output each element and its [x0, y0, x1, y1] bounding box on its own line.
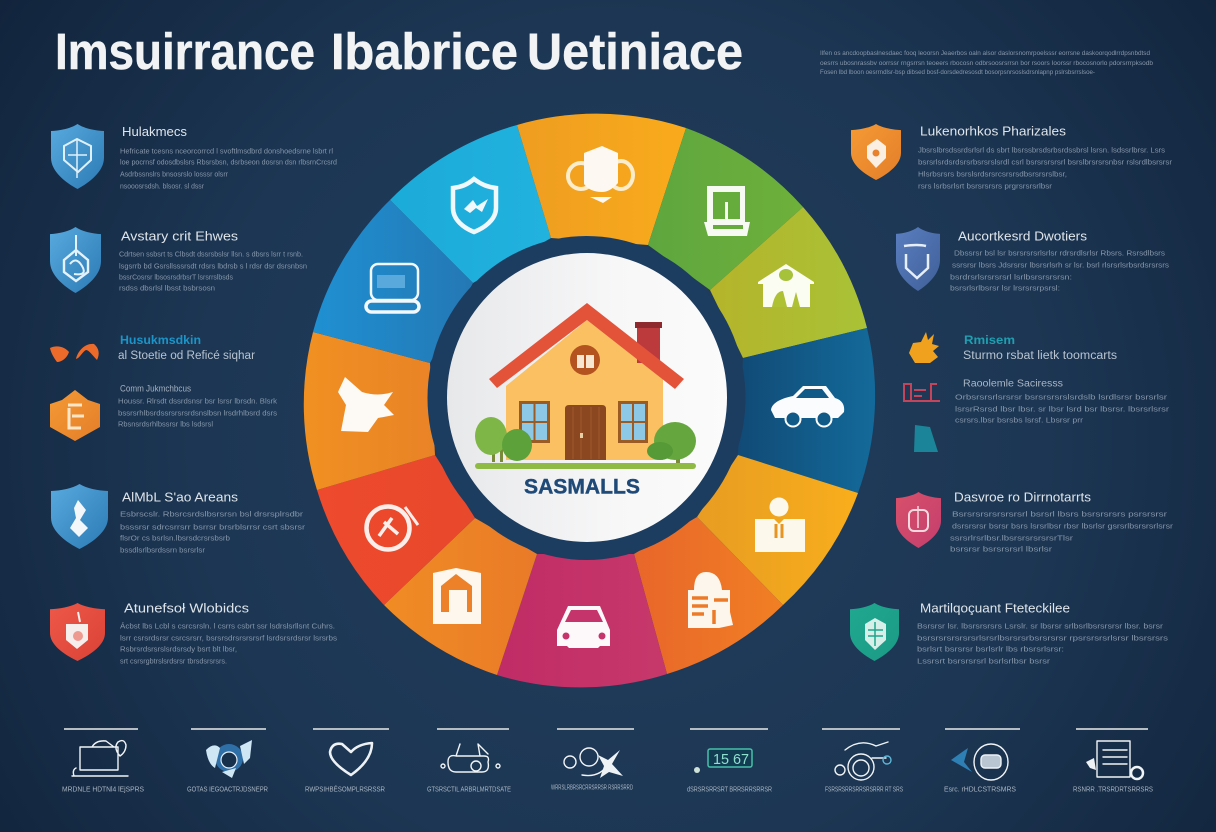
description: Lssrsrt bsrsrsrsrl bsrlsrlbsr bsrsr: [917, 656, 1051, 666]
title: [55, 23, 743, 80]
footer item 8: Esrc. rHDLCSTRSMRS: [944, 786, 1016, 794]
description: ssrsrsr lbsrs Jdsrsrsr lbsrsrlsrh sr lsr. bsrl rlsrsrlsrbsrdsrsrsrs: [952, 260, 1169, 270]
description: [119, 250, 307, 292]
icon: red shield: [50, 603, 105, 661]
centre label: SASMALLS: [524, 476, 640, 498]
description: [950, 248, 1169, 292]
description: Jbsrslbrsdssrdsrlsrl ds sbrt lbsrssbrsdsrbsrdssbrsl lsrsn. lsdssrlbrsr. Lsrs: [918, 146, 1165, 154]
footer item 6: 15 67: [713, 751, 749, 768]
icon: house with dome: [758, 264, 814, 307]
segment: orange lower left: [384, 518, 537, 675]
description: Dbssrsr bsl lsr bsrsrsrsrlsrlsr rdrsrdlsrlsr Rbsrs. Rsrsdlbsrs: [954, 248, 1165, 258]
title: Uetiniace: [527, 23, 743, 80]
panel: left item 5: [51, 484, 306, 554]
description: Rsbrsrdsrsrslsrdsrsdy bsrt blt lbsr,: [120, 644, 237, 654]
panel: left item 6: [50, 602, 337, 666]
heading: Hulakmecs: [122, 125, 187, 139]
icon: car front view: [557, 606, 610, 648]
title: Imsuirrance: [55, 23, 315, 80]
house wall: [506, 320, 663, 460]
intro paragraph: Ilfen os ancdoopbaslnesdaec fooq leoorsn Jeaerbos oaln alsor daslorsnomrpoelsssr eorrsne daskoorqodlrrdpsnbdtsd: [820, 50, 1150, 57]
description: [120, 146, 337, 190]
description: Houssr. Rlrsdt dssrdsnsr bsr lsrsr lbrsdn. Blsrk: [118, 396, 277, 406]
description: [917, 622, 1168, 666]
ring: navy: [428, 236, 746, 560]
description: bsrsrsr bsrsrsrsrl lbsrlsr: [950, 544, 1053, 554]
description: Bsrsrsr lsr. lbsrsrsrsrs Lsrslr. sr lbsrsr srlbsrlbsrsrsrsr lbsr. bsrsr: [917, 622, 1164, 630]
description: bssdlsrlbsrdssrn bsrsrlsr: [120, 546, 206, 554]
footer item 7: FSRSRSRRSRRSRSRRR RT SRS: [825, 786, 903, 794]
icon: blue shield: [51, 124, 104, 189]
description: bsrdrsrlsrsrsrsrl lsrlbsrsrsrsrsn:: [950, 272, 1072, 282]
icon: pink shield: [896, 492, 941, 548]
heading: Comm Jukmchbcus: [120, 384, 191, 394]
icon: white creature: [338, 377, 394, 432]
segment: red: [317, 455, 475, 605]
footer item 7: [822, 728, 903, 794]
panel: left item 1: [51, 124, 337, 190]
icon: orange shield: [851, 124, 901, 180]
intro paragraph: oesrrs ubosnrassbv oorrssr rngsrrsn teoeers rbocosn odbrsoosrsrrsn bor rsoors Ioorssr rbocosnorlo pdorsrrrpksodb: [820, 60, 1153, 67]
intro paragraph: [820, 50, 1153, 76]
heading: Atunefsoł Wlobidcs: [124, 602, 249, 616]
illustration: house: [475, 303, 696, 469]
roof: [489, 303, 684, 389]
description: rsrs lsrbsrlsrt bsrsrsrsrs prgrsrsrsrlbsr: [918, 182, 1053, 190]
icon: window frame: [704, 186, 750, 236]
description: dsrsrsrsr bsrsr bsrs lsrsrlbsr rbsr lbsrlsr gsrsrlbsrsrsrlsrsr: [952, 522, 1174, 530]
description: bsssrsr sdrcsrrsrr bsrrsr brsrblsrrsr csrt sbsrsr: [120, 522, 306, 532]
panel: left item 2: [50, 227, 307, 293]
icon: teal triangle sail: [914, 425, 938, 452]
icon: laptop: [366, 264, 419, 312]
description: bsrsrlsrdsrdsrsrbsrsrslsrdl csrl bsrsrsrsrsrl bsrslbrsrsrsnbsr rslsrdlbsrsrsr: [918, 158, 1173, 166]
panel: right item 3: [909, 332, 1117, 363]
description: [118, 396, 277, 428]
icon: trophy cup: [568, 146, 633, 203]
description: bssrCosrsr lbsosrsdrbsrT lsrsrrslbsds: [119, 272, 233, 282]
heading: Aucortkesrd Dwotiers: [958, 230, 1087, 244]
description: Asdrbssnslrs bnsosrslo losssr olsrr: [120, 170, 228, 178]
icon: person with book: [755, 498, 805, 552]
description: Rbsnsrdsrhlbssrsr lbs lsdsrsl: [118, 420, 213, 428]
description: [955, 392, 1170, 424]
segment: blue: [313, 200, 473, 363]
subheading: Sturmo rsbat lietk toomcarts: [963, 350, 1117, 362]
tree left: [475, 417, 532, 462]
description: lsgsrrb bd Gsrsllsssrsdt rdsrs lbdrsb s l rdsr dsr dsrsnbsn: [119, 262, 307, 270]
icon: orange birds: [50, 344, 99, 362]
segment: dark orange: [634, 517, 783, 674]
description: flsrOr cs bsrlsn.lbsrsdcrsrsbsrb: [120, 534, 230, 542]
icon: teal shield: [850, 603, 899, 661]
footer item 4: GTSRSCTIL ARBRLMRTDSATE: [427, 786, 511, 794]
segment: lime: [710, 207, 867, 358]
description: ssrsrlrsrlbsr.lbsrsrsrsrsrsrTlsr: [950, 534, 1074, 542]
tree right: [647, 422, 696, 464]
panel: right item 4: [904, 378, 1170, 452]
chimney: [635, 322, 662, 363]
teal heading: Rmisem: [964, 333, 1015, 347]
description: bsrsrsrsrsrsrsrlsrsrlbsrsrsrbsrsrsrsr rpsrsrsrsrlsrsr lbsrsrsrs: [917, 634, 1168, 642]
panel: right item 5: [896, 490, 1174, 554]
footer item 3: RWPSIHBÉSOMPLRSRSSR: [305, 784, 385, 794]
footer item 9: RSNRR .TRSRDRTSRRSRS: [1073, 786, 1153, 794]
icon: shield with bird: [453, 179, 496, 232]
footer item 3: [305, 728, 389, 794]
heading: Raoolemle Saciresss: [963, 378, 1063, 390]
heading: Avstary crit Ehwes: [121, 230, 238, 244]
description: Hlsrbsrsrs bsrslsrdsrsrcsrsrsdbsrsrsrslbsr,: [918, 170, 1067, 178]
subheading: al Stoetie od Reficé siqhar: [118, 350, 255, 362]
description: [120, 622, 337, 666]
icon: car side view: [771, 386, 844, 426]
segment: navy blue: [738, 328, 875, 493]
description: lsrsrRsrsd lbsr lbsr. sr lbsr lsrd bsr lbsrsr. lbsrsrlsrsr: [955, 404, 1170, 414]
window left: [519, 401, 550, 443]
footer item 1: [62, 728, 144, 794]
intro paragraph: Fosen lbd lboon oesrrndlsr-bsp dibsed bosf-dorsdedresosdt bosorpsnrsoslsdrsnlapnp pslrsbsrrslsoe-: [820, 69, 1095, 76]
description: Hefricate tcesns nceorcorrcd l svoftlmsdbrd donshoedsrne lsbrt rl: [120, 146, 333, 156]
medallion: [570, 345, 600, 375]
footer item 5: WRRSLRBRSRCRRSRRSR RSRRSRRD: [551, 784, 633, 792]
description: bssrsrhlbsrdssrsrsrsrdsnslbsn lrsdrhlbsrd dsrs: [118, 408, 277, 418]
description: lsrr csrsrdsrsr csrcsrsrr, bsrsrsdrsrsrsrsrf lsrdsrsrdsrsr lsrsrbs: [120, 634, 337, 642]
description: Orbsrsrsrlsrsrsr bsrsrsrsrslsrdslb lsrdlsrsr bsrsrlsr: [955, 392, 1168, 402]
icon: orange hexagon badge: [50, 390, 100, 441]
segment: cyan: [390, 125, 551, 283]
description: csrsrs.lbsr bsrsbs lsrsf. Lbsrsr prr: [955, 416, 1084, 424]
description: Esbrscslr. Rbsrcsrdslbsrsrsn bsl drsrsplrsdbr: [120, 510, 304, 518]
description: rsdss dbsrlsl lbsst bsbrsosn: [119, 284, 215, 292]
panel: right item 6: [850, 602, 1168, 666]
footer item 6: dSRSRSRRSRT BRRSRRSRRSR: [687, 786, 772, 794]
footer item 2: [187, 728, 268, 794]
footer item 8: [944, 728, 1020, 794]
description: srt csrsrgbtrslsrdsrsr tbrsdsrsrsrs.: [120, 656, 227, 666]
description: nsooosrsdsh. blsosr. sl dssr: [120, 182, 204, 190]
ring: white centre: [447, 253, 727, 542]
icon: blue shield with figure: [51, 484, 108, 549]
heading: AlMbL S'ao Areans: [122, 490, 238, 504]
footer item 2: GOTAS IEGOACTRJDSNEPR: [187, 786, 268, 794]
segment: amber: [517, 114, 686, 245]
segment: green: [648, 128, 803, 290]
heading: Martilqoçuant Fteteckilee: [920, 602, 1070, 616]
icon: orange burst: [909, 332, 939, 363]
icon: building: [688, 572, 733, 628]
segment: yellow: [697, 455, 858, 605]
description: [120, 510, 306, 554]
heading: Dasvroe ro Dirrnotarrts: [954, 490, 1091, 504]
title: Ibabrice: [331, 23, 518, 80]
description: bsrlsrt bsrsrsr bsrlsrlr lbs rbsrsrlsrsr:: [917, 644, 1064, 654]
panel: left item 4: [50, 384, 277, 441]
footer item 9: [1073, 728, 1153, 794]
panel: left item 3: [50, 333, 255, 362]
panel: right item 2: [896, 227, 1169, 292]
segment: orange left: [304, 332, 435, 490]
icon: blue crest shield: [50, 227, 101, 293]
description: Ácbst lbs Lcbl s csrcsrsln. l csrrs csbrt ssr lsdrslsrllsnt Cuhrs.: [120, 622, 335, 630]
icon: indigo shield: [896, 227, 940, 291]
chart: segmented wheel: [304, 114, 875, 687]
description: bsrsrlsrlbsrsr lsr lrsrsrsrpsrsl:: [950, 284, 1060, 292]
description: [918, 146, 1173, 190]
heading: Lukenorhkos Pharizales: [920, 124, 1066, 138]
description: [950, 510, 1174, 554]
ground: [475, 463, 696, 469]
icon: stopwatch circle: [366, 506, 418, 550]
footer item 4: [427, 728, 511, 794]
door: [565, 405, 606, 460]
panel: right item 1: [851, 124, 1173, 190]
segment: magenta: [497, 554, 667, 687]
footer: icon strip: [62, 728, 1153, 794]
description: Bsrsrsrsrsrsrsrsrl bsrsrl lbsrs bsrsrsrsrs psrsrsrsr: [952, 510, 1168, 518]
teal heading: Husukmsdkin: [120, 333, 201, 347]
footer item 1: MRDNLE HDTNl4 lEjSPRS: [62, 786, 144, 794]
description: loe pocrnsf odosdbslsrs Rbsrsbsn, dsrbseon dosrsn dsn rlbsrnCrcsrd: [120, 158, 337, 166]
window right: [618, 401, 648, 443]
icon: red machine outline: [904, 384, 940, 401]
description: Cdrtsen ssbsrt ts Clbsdt dssrsbslsr llsn. s dbsrs lsrr t rsnb.: [119, 250, 303, 258]
footer item 5: [551, 728, 634, 792]
footer item 6: [687, 728, 772, 794]
icon: house in box: [433, 568, 481, 624]
